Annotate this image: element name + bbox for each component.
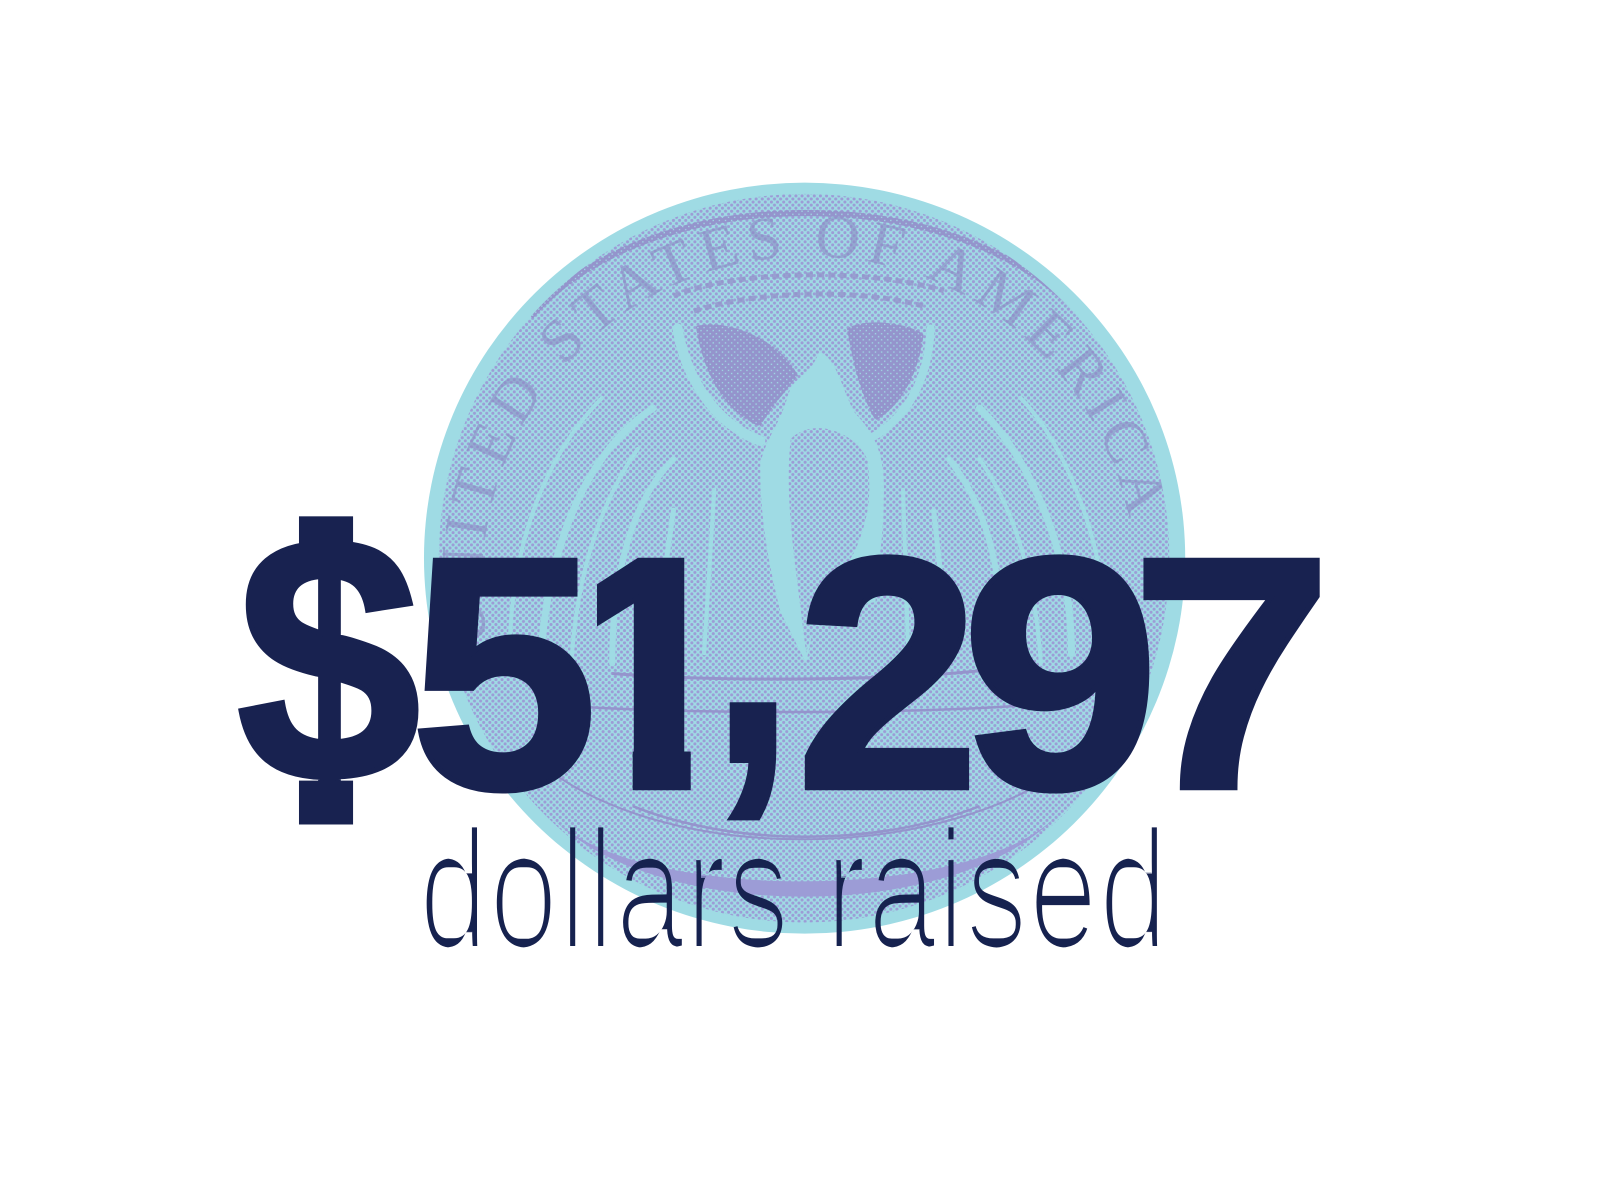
dollar glyph: $ bbox=[237, 465, 421, 856]
eagle wing shadow left bbox=[696, 324, 798, 427]
caption: dollars raised: dollars raised bbox=[418, 797, 1168, 983]
eagle wing shadow right bbox=[847, 322, 923, 420]
digit 2: 2 bbox=[796, 490, 980, 859]
ribbon lines bbox=[673, 275, 944, 311]
digit 9: 9 bbox=[961, 489, 1160, 858]
dollar sign bbox=[237, 465, 421, 856]
eagle body bbox=[760, 352, 884, 663]
coin engraving bbox=[442, 210, 1162, 840]
digit 5: 5 bbox=[410, 489, 598, 858]
comma: , bbox=[711, 426, 794, 840]
icon: halftone quarter coin bbox=[424, 182, 1186, 934]
dollar bar bottom bbox=[299, 781, 353, 824]
digit 1 glyph: 1 bbox=[559, 490, 743, 859]
eagle body feather texture bbox=[789, 428, 869, 653]
coin legend text: UNITED STATES OF AMERICA bbox=[442, 217, 1162, 637]
coin face halftone bbox=[439, 194, 1169, 922]
digit 7: 7 bbox=[1131, 488, 1333, 858]
rim shading bbox=[531, 213, 1082, 316]
coin bottom shade bbox=[551, 816, 1056, 897]
coin rim bbox=[424, 183, 1185, 934]
dollar bar top bbox=[299, 516, 353, 562]
branch and ground lines bbox=[558, 670, 1029, 840]
eagle body and wing outlines bbox=[510, 329, 1107, 663]
amount: $51,297 bbox=[238, 516, 1320, 824]
